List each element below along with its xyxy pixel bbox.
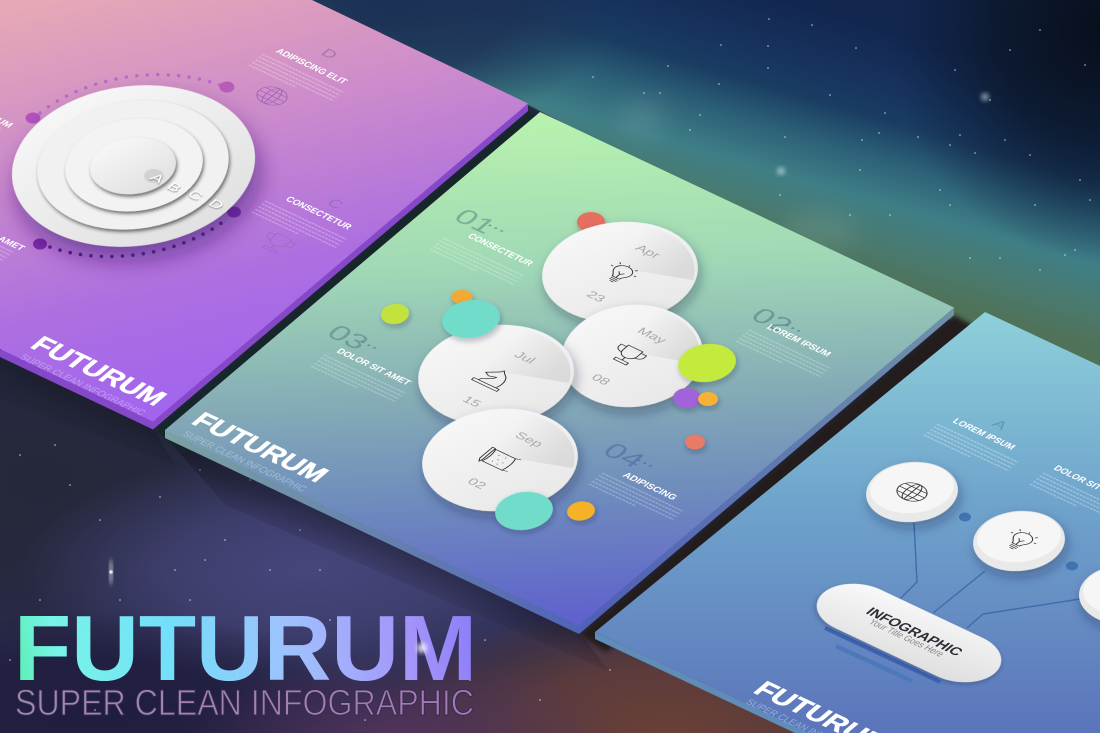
sparkle star [109, 559, 113, 585]
title: FUTURUM [14, 596, 477, 700]
disc: Apr [538, 215, 702, 329]
item 04: 04 [596, 438, 651, 473]
connector lines [900, 523, 1080, 628]
panel edge [595, 632, 809, 733]
item A: A [988, 417, 1011, 432]
item 01: CONSECTETUR [465, 232, 535, 268]
item 03 [311, 320, 413, 404]
underline bar lower [836, 646, 912, 681]
item C: C [323, 196, 347, 212]
brand: FUTURUM [24, 332, 172, 410]
item 01: 01 [447, 204, 502, 239]
brand: SUPER CLEAN INFOGRAPHIC [17, 353, 147, 417]
disc letters: D [205, 197, 227, 212]
item C [252, 195, 354, 250]
item 04: ADIPISCING [620, 471, 679, 502]
disc letters [146, 171, 227, 212]
panel shadows [0, 108, 990, 672]
item 03: 03 [320, 320, 375, 355]
item A [924, 417, 1018, 473]
panel: green to blue date discs infographic [165, 112, 954, 634]
item B cropped [0, 92, 15, 141]
dotted ring upper [40, 75, 220, 113]
title pill: INFOGRAPHIC [862, 605, 966, 659]
item 02: 02 [744, 303, 799, 338]
item 03: DOLOR SIT AMET [334, 347, 413, 387]
item 04 [589, 438, 683, 522]
item D: ADIPISCING ELIT [273, 47, 350, 86]
icon: trophy [256, 231, 297, 256]
disc: bulb [971, 507, 1067, 575]
panel face [0, 0, 528, 422]
disc: Jul: 15 [460, 394, 484, 409]
stacked discs [3, 72, 264, 260]
ring markers [26, 82, 241, 250]
disc: May: 08 [589, 372, 613, 387]
disc: May: May [634, 325, 670, 346]
brand: FUTURUM [185, 408, 334, 487]
item B cropped [1030, 464, 1100, 522]
disc: Jul: Jul [511, 349, 539, 366]
item C: CONSECTETUR [283, 195, 354, 232]
subtitle: SUPER CLEAN INFOGRAPHIC [15, 682, 474, 723]
underline bars [825, 628, 940, 682]
disc letters: C [184, 188, 206, 203]
disc: Sep [418, 402, 582, 518]
panel edge [0, 104, 528, 430]
disc: Apr: 23 [584, 289, 608, 304]
panel edge [165, 308, 954, 634]
disc: cropped [1079, 565, 1100, 625]
disc: globe [864, 458, 960, 526]
panel: purple radial layers infographic [0, 0, 528, 430]
disc letters: B [163, 180, 185, 195]
item D: D [317, 46, 341, 62]
brand: SUPER CLEAN INFOGRAPHIC [180, 430, 309, 494]
disc: Sep: Sep [512, 430, 546, 449]
item 02 [736, 303, 833, 379]
front blobs [440, 296, 738, 534]
disc: Jul [414, 318, 578, 432]
panel face [595, 312, 1100, 733]
glow stars [777, 93, 989, 175]
disc: Sep: 02 [465, 476, 489, 491]
icon: globe [251, 83, 293, 109]
panel: blue connected infographic [595, 312, 1100, 733]
blue dots [959, 512, 1078, 570]
item 02: LOREM IPSUM [764, 323, 833, 359]
panel face [165, 112, 954, 626]
title pill [801, 573, 1017, 693]
item A cropped [0, 212, 27, 263]
disc: May [557, 299, 707, 413]
item 01 [430, 204, 535, 287]
back blobs [380, 212, 705, 450]
item D [249, 46, 350, 103]
item A: LOREM IPSUM [950, 417, 1017, 452]
title pill: Your Title Goes Here [866, 618, 946, 659]
disc: Apr: Apr [633, 242, 664, 261]
disc letters: A [146, 171, 169, 186]
dotted ring lower [50, 218, 228, 257]
